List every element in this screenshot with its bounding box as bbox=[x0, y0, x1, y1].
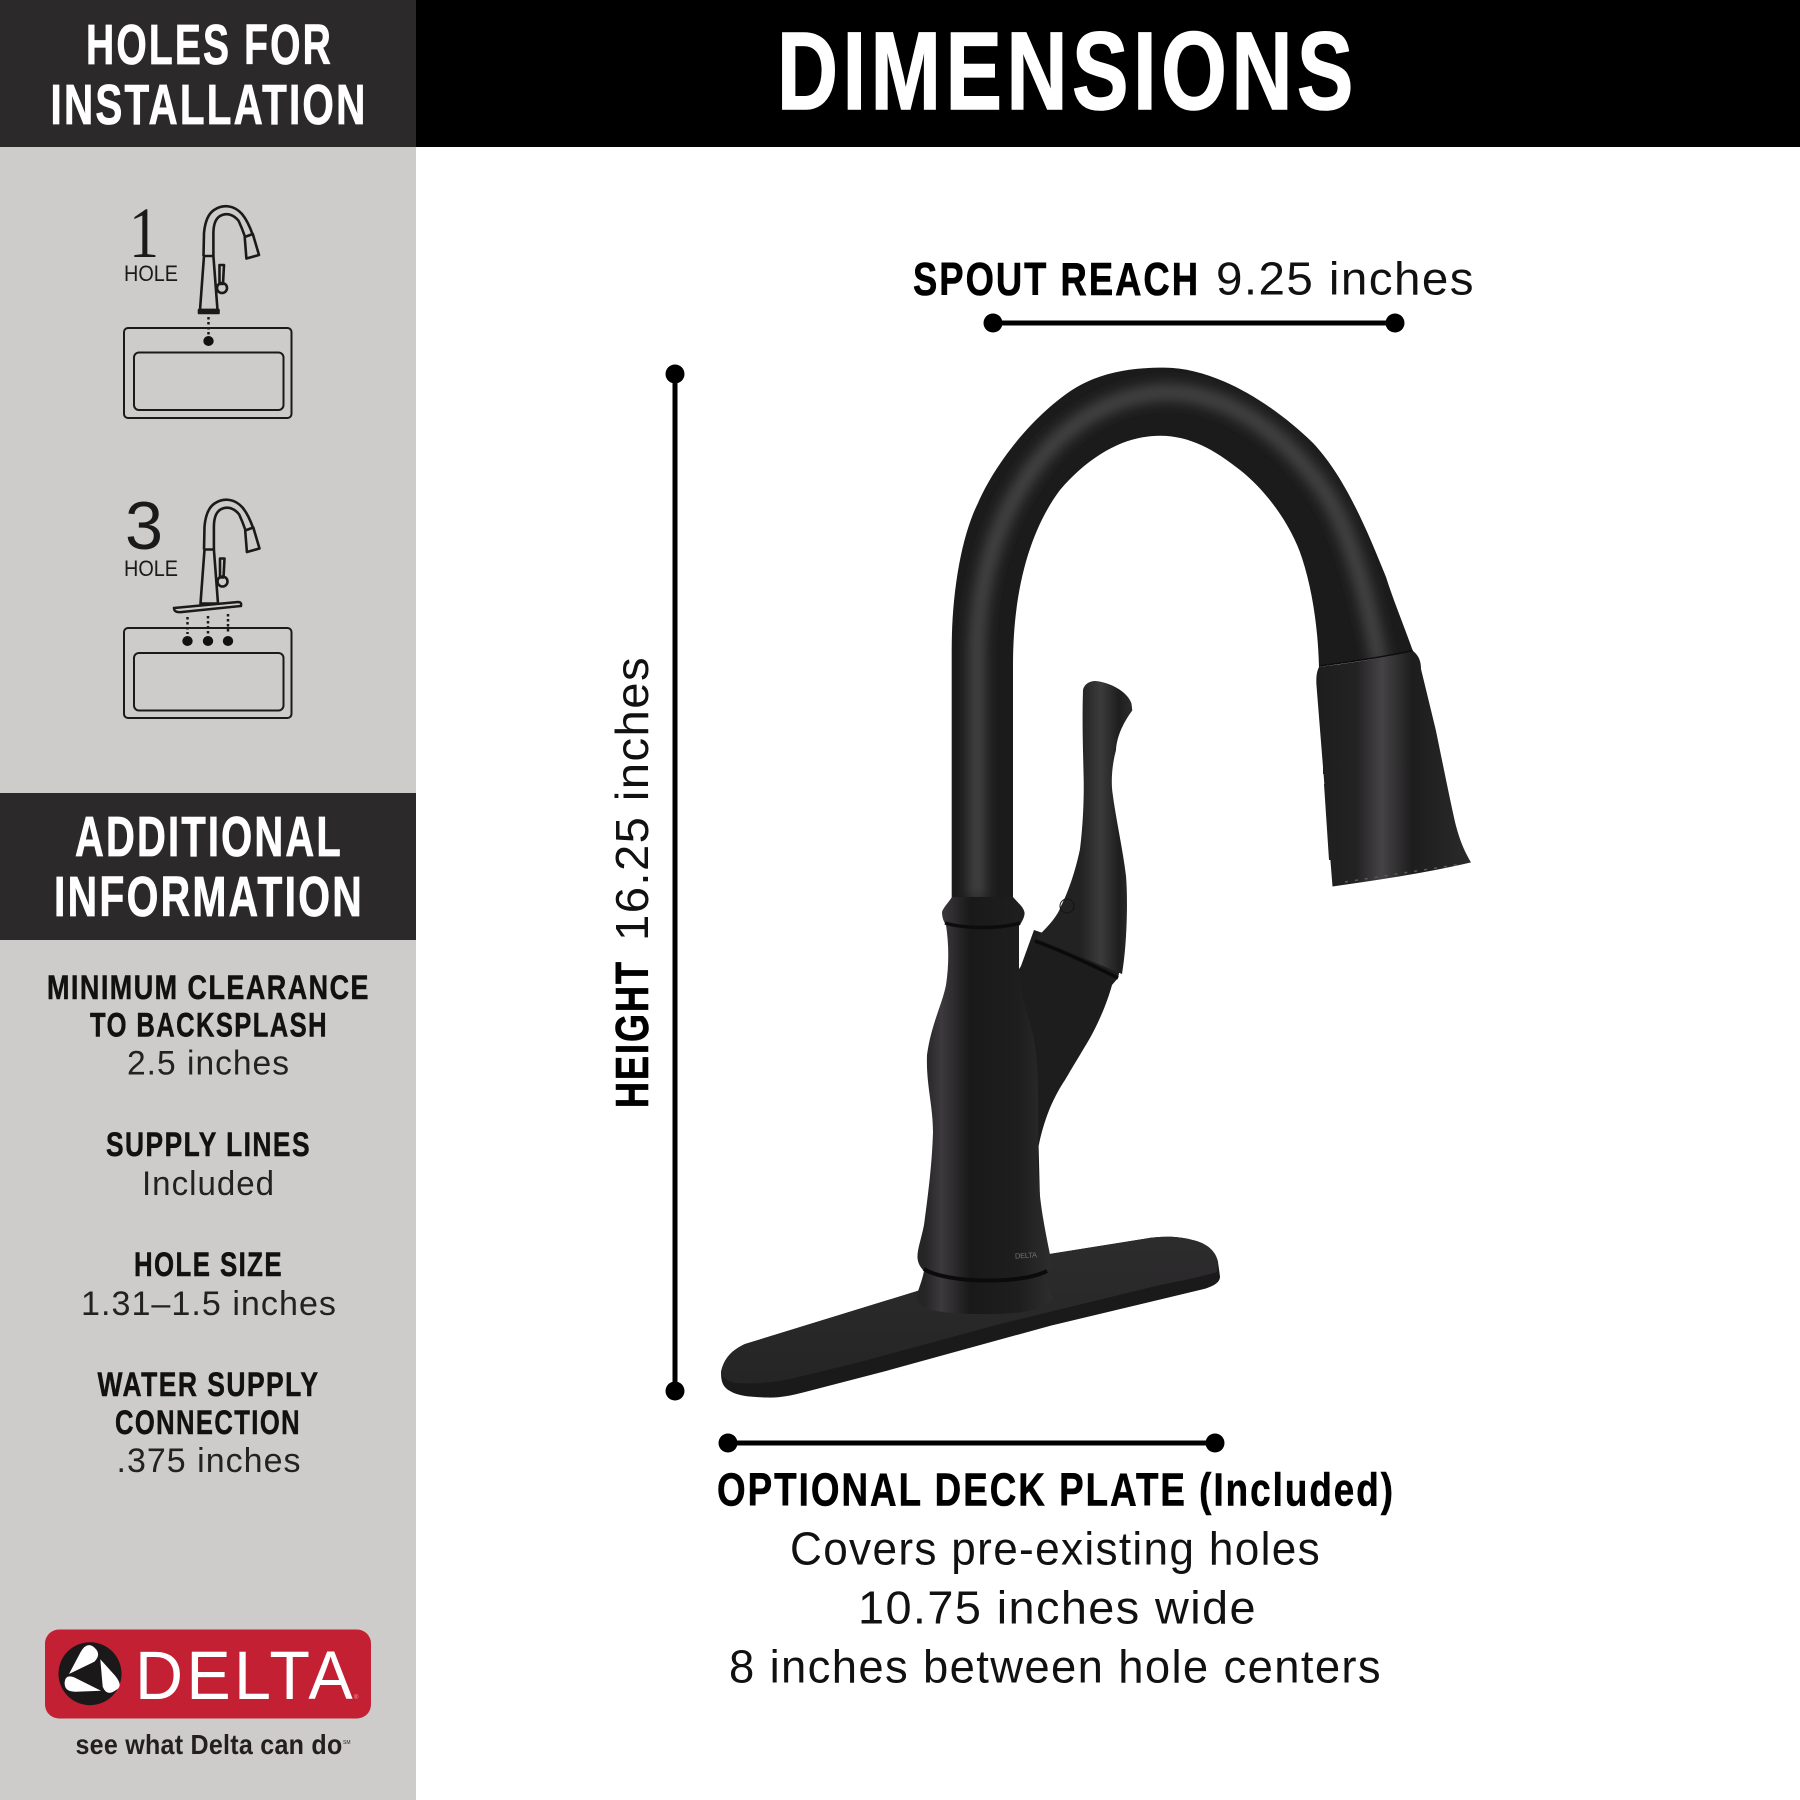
text block: optional deck plate bbox=[717, 1464, 1395, 1692]
dimension: height: 16.25 inches bbox=[606, 656, 658, 941]
text block: optional deck plate: OPTIONAL DECK PLATE (Included) bbox=[717, 1464, 1395, 1516]
title: DIMENSIONS bbox=[777, 10, 1358, 133]
heading: holes for installation: INSTALLATION bbox=[50, 73, 368, 137]
heading: additional information: INFORMATION bbox=[54, 865, 364, 929]
icon: three hole installation: 3 bbox=[125, 488, 163, 564]
dimension: spout reach: 9.25 inches bbox=[1216, 252, 1475, 304]
text block: hole size: HOLE SIZE bbox=[134, 1246, 283, 1284]
icon: one hole installation: 1 bbox=[129, 193, 159, 273]
faucet body bbox=[916, 897, 1053, 1314]
text block: minimum clearance: 2.5 inches bbox=[127, 1044, 290, 1082]
text block: optional deck plate: 8 inches between hole centers bbox=[729, 1640, 1382, 1692]
sprayer head bbox=[1316, 650, 1471, 886]
text block: minimum clearance: MINIMUM CLEARANCE bbox=[47, 969, 370, 1007]
text block: hole size bbox=[81, 1246, 337, 1323]
dimension: spout reach bbox=[913, 252, 1475, 332]
text block: hole size: 1.31–1.5 inches bbox=[81, 1285, 337, 1323]
logo: Delta: SM bbox=[343, 1740, 350, 1746]
text block: water supply connection bbox=[98, 1366, 320, 1480]
heading: holes for installation bbox=[0, 0, 416, 147]
panel: sidebar bbox=[0, 0, 416, 1800]
dimension: spout reach: SPOUT REACH bbox=[913, 253, 1200, 305]
icon: one hole installation bbox=[124, 193, 292, 418]
heading: additional information bbox=[0, 793, 416, 940]
text block: optional deck plate: 10.75 inches wide bbox=[858, 1582, 1257, 1634]
logo: Delta: ® bbox=[354, 1694, 359, 1701]
dimension: deck plate line bbox=[718, 1434, 1224, 1452]
logo: Delta: see what Delta can do bbox=[76, 1729, 342, 1760]
text block: water supply connection: .375 inches bbox=[116, 1442, 302, 1480]
icon: one hole installation: HOLE bbox=[124, 261, 178, 286]
text block: water supply connection: CONNECTION bbox=[115, 1404, 301, 1442]
logo: Delta bbox=[45, 1630, 371, 1760]
text block: optional deck plate: Covers pre-existing holes bbox=[790, 1522, 1321, 1574]
arm bbox=[1000, 930, 1122, 1200]
text block: supply lines bbox=[106, 1126, 311, 1203]
dimension: height bbox=[606, 364, 684, 1400]
text block: water supply connection: WATER SUPPLY bbox=[98, 1366, 320, 1404]
heading: additional information: ADDITIONAL bbox=[75, 805, 343, 869]
handle bbox=[1035, 681, 1132, 978]
dimension: height: HEIGHT bbox=[606, 960, 658, 1108]
heading: holes for installation: HOLES FOR bbox=[86, 13, 333, 77]
text block: minimum clearance bbox=[47, 969, 370, 1082]
faucet illustration bbox=[721, 368, 1471, 1398]
faucet body: DELTA bbox=[1015, 1250, 1037, 1261]
text block: supply lines: Included bbox=[142, 1165, 275, 1203]
deck plate bbox=[721, 1237, 1220, 1398]
text block: supply lines: SUPPLY LINES bbox=[106, 1126, 311, 1164]
text block: minimum clearance: TO BACKSPLASH bbox=[90, 1006, 328, 1044]
icon: three hole installation: HOLE bbox=[124, 556, 178, 581]
spout bbox=[952, 368, 1413, 900]
logo: Delta: DELTA bbox=[135, 1637, 356, 1714]
icon: three hole installation bbox=[124, 488, 292, 718]
title banner bbox=[416, 0, 1800, 147]
